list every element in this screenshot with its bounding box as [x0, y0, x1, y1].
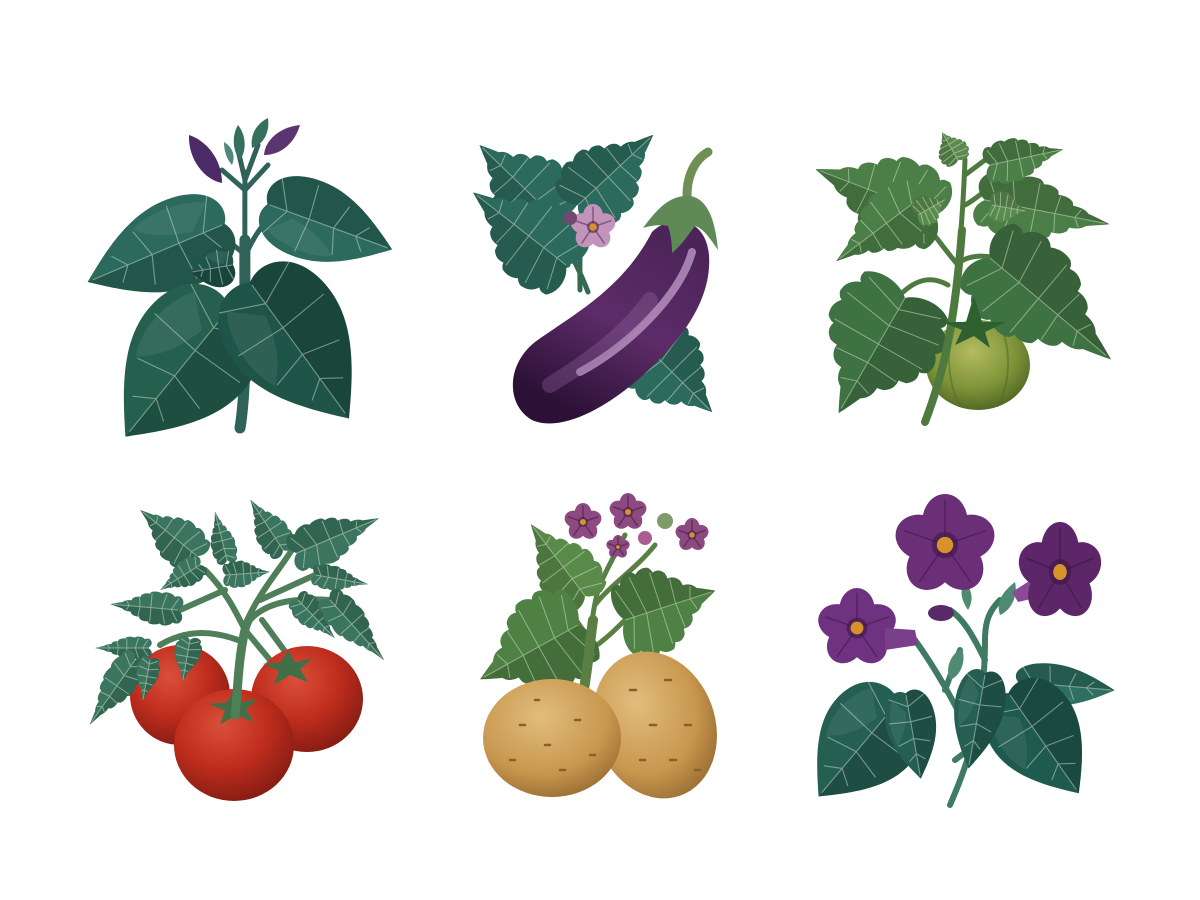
stems — [160, 545, 330, 715]
leaf: upper left — [70, 181, 246, 324]
leaf: upper right — [250, 165, 406, 287]
stems — [915, 600, 1000, 805]
leaf: left — [456, 578, 609, 723]
leaf: small inner — [187, 245, 238, 292]
plant: red tomatoes — [76, 490, 397, 801]
leaf: right inner — [944, 666, 1010, 773]
small leaves and buds — [928, 582, 1016, 680]
leaf: upper left — [800, 128, 959, 260]
eggplant body — [513, 221, 709, 423]
highlight — [580, 252, 692, 372]
tomato leaves — [76, 490, 397, 735]
plant: budding leafy stem — [70, 118, 406, 476]
stems — [900, 142, 1000, 422]
plant: eggplant — [446, 106, 742, 442]
trumpet of left flower — [885, 628, 918, 650]
plant: potatoes — [456, 493, 737, 816]
leaf: lower left — [77, 264, 282, 476]
calyxes — [209, 630, 312, 725]
leaf: top right — [546, 106, 680, 239]
green tomato fruit — [926, 320, 1030, 410]
calyx and stalk — [643, 152, 718, 253]
flower: top — [890, 494, 1000, 599]
bud — [563, 211, 577, 225]
leaf: lower right — [199, 243, 398, 454]
leaf: right top — [1014, 661, 1116, 711]
potato flowers — [562, 493, 710, 560]
tomato: back left — [130, 645, 230, 745]
leaf: small centre left — [908, 185, 954, 230]
leaf: left large — [781, 667, 938, 828]
stems — [570, 535, 655, 700]
leaf: top bud — [928, 124, 973, 170]
potato speckles — [510, 680, 700, 770]
leaf: left inner — [881, 687, 945, 783]
stem — [212, 145, 275, 428]
leaf: small centre right — [987, 189, 1029, 226]
flower — [568, 204, 618, 252]
tomato: front — [174, 689, 294, 801]
potato: right — [573, 634, 737, 816]
leaf: upper right — [970, 167, 1116, 256]
leaf: lower right — [948, 211, 1144, 399]
flower: right trumpet — [1012, 522, 1106, 625]
main stem front — [925, 230, 962, 422]
leaf: lower left — [787, 260, 962, 443]
leaf: right large — [970, 664, 1116, 819]
potato: left — [483, 679, 621, 797]
tomato: right — [251, 646, 363, 752]
main potato stem — [582, 620, 593, 700]
leaf: right — [605, 549, 729, 664]
plant: purple flowers — [781, 494, 1116, 828]
leaf: left low — [446, 158, 600, 305]
stems — [540, 190, 660, 380]
leaf: bottom right — [611, 311, 742, 442]
leaf: upper left lobe — [817, 169, 945, 286]
plant: green tomato — [787, 124, 1144, 443]
leaf: top small — [980, 128, 1068, 187]
buds — [189, 118, 300, 183]
leaf: top left — [450, 114, 590, 254]
fruit ribs — [949, 325, 1008, 405]
flower: left — [814, 588, 900, 671]
leaf: top — [506, 505, 614, 620]
fruit calyx — [942, 295, 1006, 348]
